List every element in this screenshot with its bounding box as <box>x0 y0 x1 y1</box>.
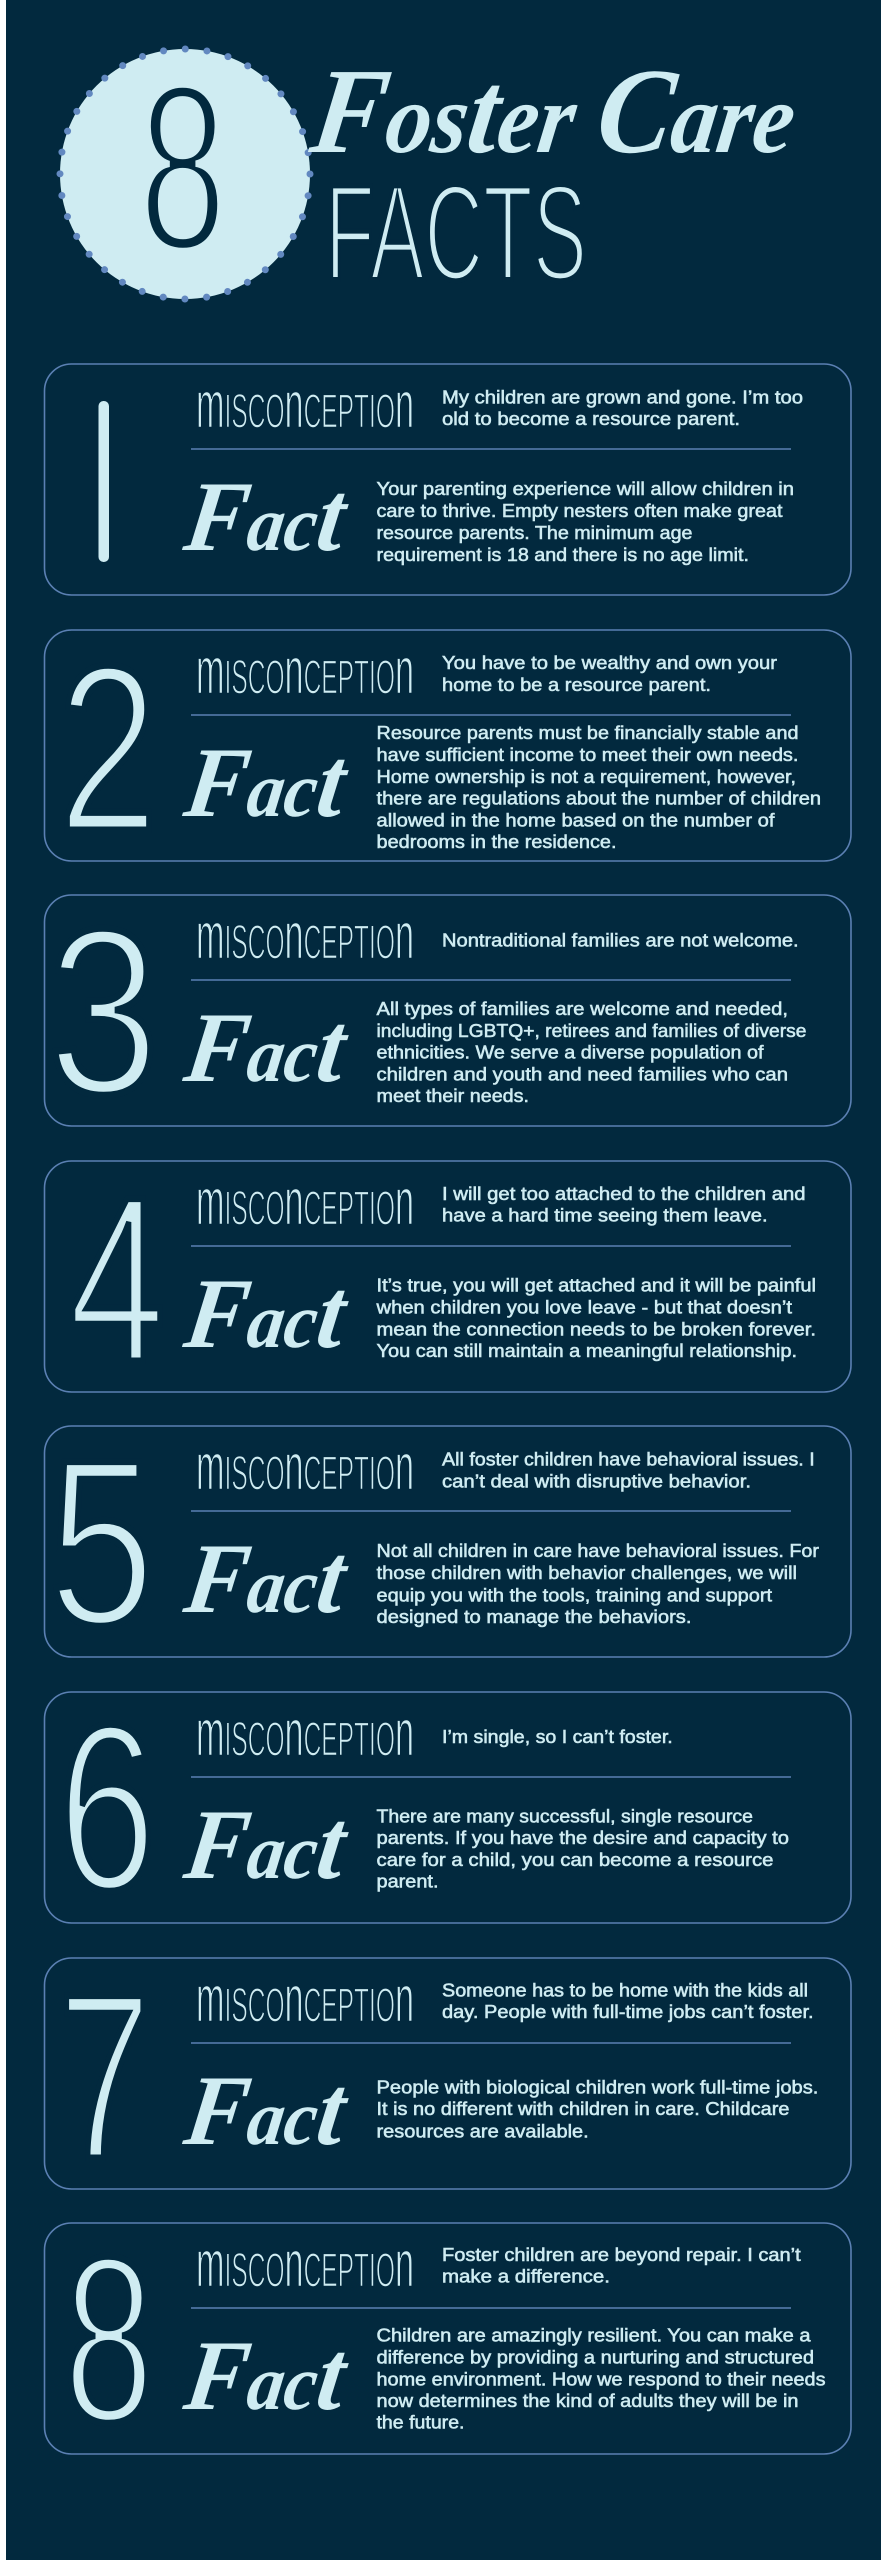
fact text <box>376 999 806 1106</box>
fact text: You can still maintain a meaningful relationship. <box>376 1341 797 1361</box>
misconception statement: All foster children have behavioral issues. I <box>442 1449 815 1469</box>
title: FACTS: FACTS <box>325 156 587 308</box>
header <box>60 37 805 308</box>
title: Foster Care: Foster Care <box>303 44 805 179</box>
misconception statement: home to be a resource parent. <box>442 675 711 695</box>
fact text: the future. <box>376 2412 464 2432</box>
fact text: allowed in the home based on the number of <box>376 810 776 830</box>
misconception statement: Nontraditional families are not welcome. <box>442 931 799 951</box>
misconception statement: Someone has to be home with the kids all <box>442 1980 808 2000</box>
fact text: Your parenting experience will allow children in <box>376 479 794 499</box>
misconception heading: mISCOnCEPTIOn <box>196 1430 414 1504</box>
fact heading: Fact <box>178 2054 355 2166</box>
panel: misconception 4 <box>44 1148 851 1411</box>
fact text: when children you love leave - but that doesn’t <box>375 1298 792 1318</box>
fact text: Home ownership is not a requirement, however, <box>376 767 796 787</box>
misconception statement: make a difference. <box>442 2267 610 2287</box>
misconception statement: day. People with full-time jobs can’t foster. <box>442 2002 814 2022</box>
fact heading: Fact <box>178 460 355 572</box>
fact text: children and youth and need families who can <box>376 1064 788 1084</box>
fact text: parent. <box>376 1872 438 1892</box>
fact text: now determines the kind of adults they will be in <box>376 2391 798 2411</box>
fact heading: Fact <box>178 1788 355 1900</box>
fact text: resource parents. The minimum age <box>376 523 692 543</box>
misconception heading: mISCOnCEPTIOn <box>196 634 414 708</box>
misconception statement <box>442 1980 814 2022</box>
panel: misconception 8 <box>44 2207 851 2471</box>
fact text: All types of families are welcome and needed, <box>376 999 788 1019</box>
fact text: parents. If you have the desire and capacity to <box>376 1828 789 1848</box>
fact text <box>376 2078 818 2142</box>
fact text: resources are available. <box>376 2122 589 2142</box>
number 5: 5 <box>48 1410 155 1675</box>
fact text: People with biological children work full-time jobs. <box>376 2078 818 2098</box>
misconception statement: can’t deal with disruptive behavior. <box>442 1472 751 1492</box>
fact text: Children are amazingly resilient. You can make a <box>376 2326 812 2346</box>
fact text: care to thrive. Empty nesters often make great <box>376 501 782 521</box>
misconception heading: mISCOnCEPTIOn <box>196 2226 414 2302</box>
number 4: 4 <box>69 1148 165 1411</box>
fact text: It is no different with children in care. Childcare <box>376 2099 790 2119</box>
fact text: There are many successful, single resource <box>376 1807 753 1827</box>
misconception statement: I will get too attached to the children and <box>442 1184 806 1204</box>
misconception statement: My children are grown and gone. I’m too <box>442 387 803 407</box>
misconception heading: mISCOnCEPTIOn <box>196 1962 414 2036</box>
misconception statement: old to become a resource parent. <box>442 409 740 429</box>
misconception heading: mISCOnCEPTIOn <box>196 1164 414 1240</box>
number 7: 7 <box>58 1946 151 2209</box>
misconception statement: You have to be wealthy and own your <box>442 653 777 673</box>
misconception heading: mISCOnCEPTIOn <box>196 898 414 974</box>
fact text <box>376 723 821 852</box>
misconception statement <box>442 387 803 429</box>
fact text: designed to manage the behaviors. <box>376 1607 692 1627</box>
fact text: mean the connection needs to be broken forever. <box>376 1319 816 1339</box>
panel: misconception 7 <box>44 1946 851 2209</box>
panel: misconception 6 <box>44 1676 851 1940</box>
misconception statement: I’m single, so I can’t foster. <box>442 1727 673 1747</box>
fact text: Not all children in care have behavioral issues. For <box>376 1541 819 1561</box>
fact text: care for a child, you can become a resource <box>376 1850 774 1870</box>
misconception statement <box>442 1449 815 1492</box>
number 6: 6 <box>58 1676 156 1940</box>
number 8: 8 <box>64 2207 154 2471</box>
fact text <box>376 1541 819 1627</box>
badge: dotted circle with number 8 <box>60 37 310 300</box>
fact text: difference by providing a nurturing and structured <box>376 2348 814 2368</box>
panel: misconception 5 <box>44 1410 851 1675</box>
number 2: 2 <box>58 617 158 881</box>
fact heading: Fact <box>178 1257 355 1369</box>
fact text: meet their needs. <box>376 1086 529 1106</box>
panel: misconception 2 <box>44 617 851 881</box>
badge: dotted circle with number 8: 8 <box>139 37 226 300</box>
panel: misconception 1 <box>44 363 852 596</box>
fact text <box>376 479 794 565</box>
fact text: It’s true, you will get attached and it will be painful <box>376 1276 816 1296</box>
number 1: 1 <box>56 346 148 615</box>
fact text: equip you with the tools, training and support <box>376 1585 772 1605</box>
fact text <box>375 1276 816 1361</box>
fact text: have sufficient income to meet their own needs. <box>376 745 798 765</box>
misconception statement <box>442 653 777 695</box>
misconception statement: have a hard time seeing them leave. <box>442 1206 768 1226</box>
fact heading: Fact <box>178 1522 355 1634</box>
fact text <box>376 2326 826 2432</box>
panel: misconception 3 <box>44 880 851 1144</box>
fact heading: Fact <box>178 2319 355 2431</box>
misconception statement <box>442 1184 806 1226</box>
fact text: home environment. How we respond to their needs <box>376 2369 826 2389</box>
fact text: ethnicities. We serve a diverse population of <box>376 1043 765 1063</box>
fact heading: Fact <box>178 991 355 1103</box>
fact text: Resource parents must be financially stable and <box>376 723 798 743</box>
fact text: requirement is 18 and there is no age limit. <box>376 545 749 565</box>
fact text <box>376 1807 789 1892</box>
fact text: bedrooms in the residence. <box>376 832 616 852</box>
misconception heading: mISCOnCEPTIOn <box>196 368 414 442</box>
number 3: 3 <box>48 880 159 1144</box>
fact text: there are regulations about the number of children <box>376 789 821 809</box>
misconception heading: mISCOnCEPTIOn <box>196 1696 414 1770</box>
misconception statement <box>442 2245 801 2287</box>
misconception statement: Foster children are beyond repair. I can’t <box>442 2245 801 2265</box>
fact heading: Fact <box>178 726 355 838</box>
fact text: including LGBTQ+, retirees and families of diverse <box>376 1021 806 1041</box>
fact text: those children with behavior challenges, we will <box>376 1563 797 1583</box>
